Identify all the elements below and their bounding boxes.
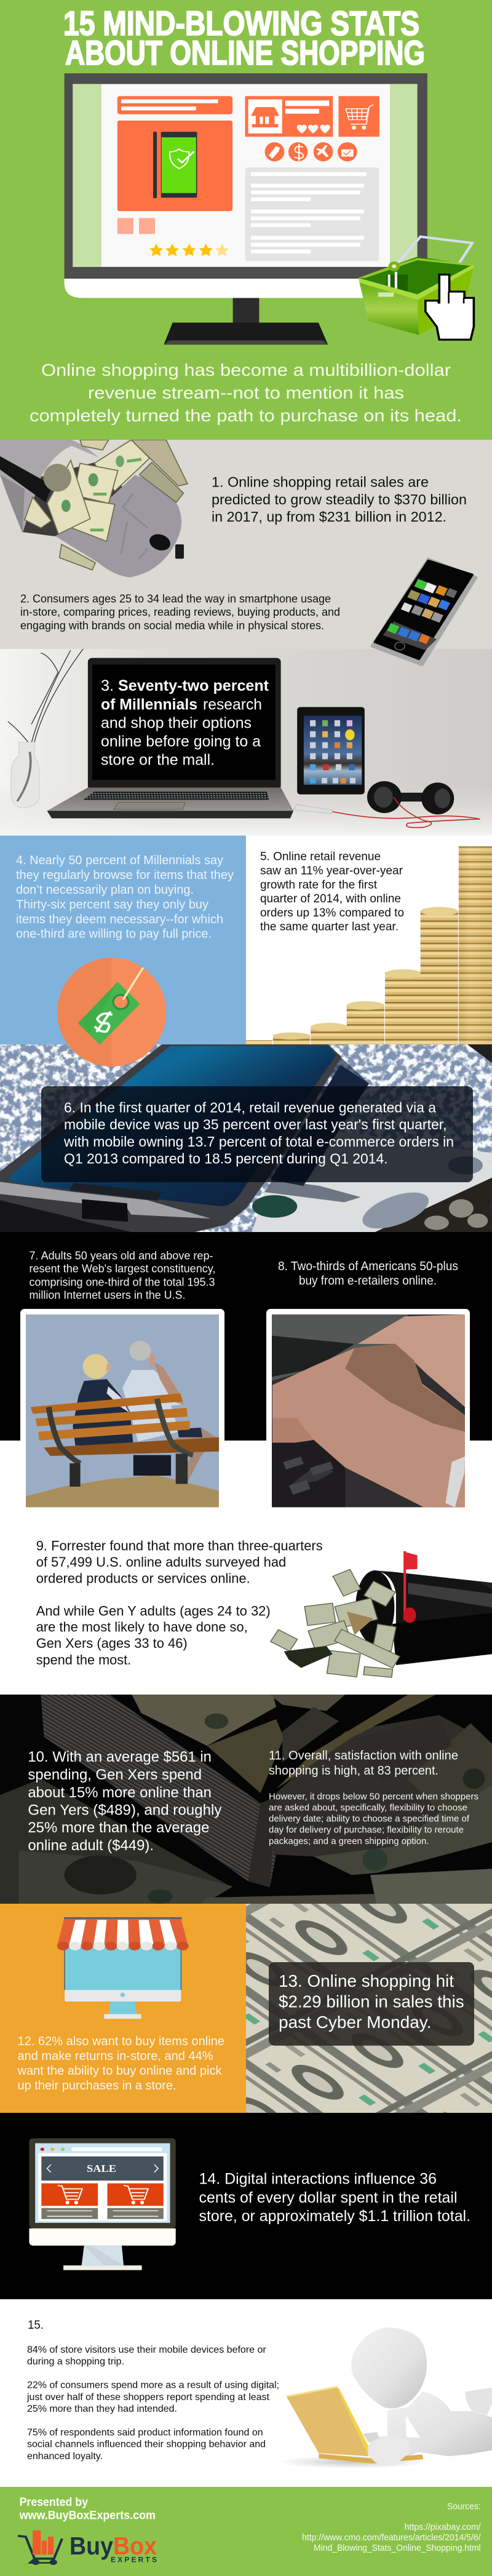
text: sources: http://www.cmo.com/features/articles/2014/5/6/ [302,2533,482,2543]
text: stat 15: just over half of these shoppers report spending at least [26,2392,270,2403]
icon: desktop monitor showing online store [65,73,427,344]
text: stat 4: don’t necessarily plan on buying. [16,883,194,897]
panel: stat 6 text box: Q1 2013 compared to 18.5 percent during Q1 2014. [64,1150,388,1166]
text: stat 12: up their purchases in a store. [17,2079,176,2093]
panel: stat 13 dollar bills photo [246,1904,492,2113]
text: stat 11 [269,1748,478,1847]
icon: Buy Box Experts logo: EXPERTS [111,2555,157,2564]
text: stat 12: 12. 62% also want to buy items online [17,2035,224,2048]
text: stat 10: 10. With an average $561 in [28,1749,212,1765]
text: stat 2: 2. Consumers ages 25 to 34 lead the way in smartphone usage [20,593,331,605]
text: stat 8: 8. Two-thirds of Americans 50-plus [278,1260,458,1273]
text: stat 10: 25% more than the average [28,1819,209,1836]
text: stat 8 [278,1260,458,1287]
text: stat 1 [212,474,467,525]
text: stat 11: packages; and a green shipping option. [269,1836,429,1847]
text: stat 4: 4. Nearly 50 percent of Millennials say [16,854,223,867]
icon: monitor showing sale web page [29,2138,176,2270]
icon: Buy Box Experts logo [18,2530,157,2565]
text: stat 4: one-third are willing to pay full price. [16,928,212,941]
text: sources: Sources: [447,2502,481,2512]
text: stat 15: 75% of respondents said product information found on [27,2427,263,2438]
panel: laptop and tablet photo [0,649,492,836]
text: stat 15: 15. [28,2319,44,2332]
icon: storefront monitor with striped awning [57,1917,189,2019]
text: intro: revenue stream--not to mention it has [88,383,404,402]
text: stat 9 [36,1538,323,1668]
text: stat 3 on laptop screen: store or the mall. [101,751,215,768]
text: stat 2: engaging with brands on social media while in physical stores. [20,619,324,632]
text: stat 1: 1. Online shopping retail sales are [212,474,429,490]
text: stat 9: are the most likely to have done so, [36,1620,248,1635]
text: stat 2 [20,593,340,632]
panel: stat 5 white background [246,835,492,1044]
text: stat 3 on laptop screen: of Millennials [101,696,197,713]
text: stat 15: during a shopping trip. [27,2356,124,2367]
panel: stat 15 white background [0,2299,492,2487]
text: stat 1: predicted to grow steadily to $370 billion [212,491,467,507]
text: intro [30,360,462,425]
panel: stat 13 text box: $2.29 billion in sales this [279,1992,464,2011]
panel: stat 14 black background [0,2113,492,2299]
panel: framed photo of hands on keyboard [266,1309,470,1513]
text: stat 14: 14. Digital interactions influence 36 [199,2170,437,2187]
text: stat 15 [26,2319,279,2462]
text: stat 12 [17,2035,224,2093]
title [63,4,425,72]
text: stat 5: orders up 13% compared to [260,906,404,920]
text: stat 14 [199,2170,470,2225]
icon: monitor showing sale web page: SALE [87,2163,116,2174]
text: stat 9: 9. Forrester found that more than three-quarters [36,1538,323,1554]
text: stat 9: ordered products or services online. [36,1571,250,1586]
panel: stat 6 phone and dollar photo [0,1044,492,1236]
text: intro: completely turned the path to purchase on its head. [30,406,462,425]
icon: green shopping basket with hand cursor [359,237,474,340]
text: stat 10: about 15% more online than [28,1784,212,1801]
panel: stat 6 text box [41,1086,473,1182]
panel: stats 10 and 11 dark money photo [0,1695,492,1904]
text: stat 5 [260,850,404,934]
text: stat 11: However, it drops below 50 percent when shoppers [269,1791,478,1802]
text: stat 9: spend the most. [36,1652,131,1668]
text: stat 11: are asked about, specifically, flexibility to choose [269,1803,467,1813]
text: stat 3 on laptop screen: online before going to a [101,733,261,750]
text: stat 7: 7. Adults 50 years old and above rep- [30,1249,213,1262]
panel: header background [0,0,492,440]
text: stat 3 on laptop screen: and shop their options [101,714,252,731]
panel: stat 4 blue background [0,835,246,1044]
text: stat 10 [28,1749,221,1854]
panel: stat 6 text box: 6. In the first quarter of 2014, retail revenue generated via a [64,1100,436,1116]
text: stat 15: 84% of store visitors use their mobile devices before or [27,2345,266,2355]
text: presented by: www.BuyBoxExperts.com [19,2510,156,2522]
text: stat 2: in-store, comparing prices, reading reviews, buying products, and [20,606,340,618]
text: stat 8: buy from e-retailers online. [299,1274,437,1287]
text: stat 3 on laptop screen: 3. [101,677,114,694]
text: stat 4: Thirty-six percent say they only buy [16,898,208,912]
panel: footer background [0,2487,492,2576]
icon: price tag in orange circle [57,958,166,1067]
panel: stats 1 and 2 background [0,440,492,652]
text: stat 9: of 57,499 U.S. online adults surveyed had [36,1554,286,1570]
text: stat 4: they regularly browse for items that they [16,869,234,882]
text: stat 10: online adult ($449). [28,1837,154,1854]
panel: stat 13 text box: 13. Online shopping hit [279,1971,454,1990]
text: stat 11: 11. Overall, satisfaction with online [269,1748,458,1762]
panel: stats 9 white background [0,1441,492,1695]
panel: stat 13 text box [269,1962,474,2046]
panel: stat 12 orange background [0,1904,246,2113]
text: stat 3 on laptop screen [101,677,269,768]
icon: smartphone with app icons [372,559,476,665]
text: stat 12: want the ability to buy online and pick [17,2064,222,2078]
text: stat 14: store, or approximately $1.1 trillion total. [199,2208,470,2225]
icon: mailbox overflowing with money [0,440,188,578]
panel: framed photo of couple on bench [20,1309,224,1513]
text: presented by [19,2496,156,2522]
text: stat 15: 22% of consumers spend more as a result of using digital; [27,2380,279,2391]
text: stat 5: the same quarter last year. [260,920,399,934]
text: stat 11: day for delivery of purchase; flexibility to reroute [269,1824,464,1835]
text: stat 15: social channels influenced their shopping behavior and [27,2439,266,2450]
text: stat 7: resent the Web's largest constituency, [30,1263,215,1275]
icon: black mailbox stuffed with cash [271,1551,492,1677]
text: stat 4 [16,854,234,941]
text: stat 5: growth rate for the first [260,878,378,891]
text: stat 10: spending, Gen Xers spend [28,1767,202,1783]
text: stat 11: shopping is high, at 83 percent. [269,1763,438,1778]
text: stat 1: in 2017, up from $231 billion in 2012. [212,509,446,525]
text: stat 12: and make returns in-store, and 44% [17,2049,213,2063]
icon: Buy Box Experts logo: Buy [69,2532,113,2560]
icon: Buy Box Experts logo: Box [113,2532,157,2560]
text: intro: Online shopping has become a multibillion-dollar [41,360,451,380]
text: stat 7: comprising one-third of the total 195.3 [30,1276,215,1288]
text: stat 9: Gen Xers (ages 33 to 46) [36,1636,188,1651]
text: stat 4: items they deem necessary--for which [16,913,223,926]
text: sources: https://pixabay.com/ [405,2522,482,2532]
text: stat 11: delivery date; ability to choose a specified time of [269,1814,470,1824]
illustration: stacks of gold coins [246,846,492,1046]
text: stat 5: 5. Online retail revenue [260,850,381,864]
text: stat 5: saw an 11% year-over-year [260,864,403,877]
text: stat 7 [30,1249,215,1302]
text: stat 7: million Internet users in the U.S. [30,1289,186,1302]
text: stat 3 on laptop screen: research [203,696,262,713]
text: stat 9: And while Gen Y adults (ages 24 to 32) [36,1603,271,1618]
text: stat 14: cents of every dollar spent in the retail [199,2189,458,2206]
text: stat 3 on laptop screen: Seventy-two percent [118,677,269,694]
text: stat 15: enhanced loyalty. [27,2451,103,2462]
text: sources: Mind_Blowing_Stats_Online_Shopping.html [314,2543,481,2553]
text: stat 10: Gen Yers ($489), and roughly [28,1802,221,1818]
text: stat 5: quarter of 2014, with online [260,892,401,905]
text: presented by: Presented by [20,2496,88,2509]
panel: stat 6 text box: mobile device was up 35 percent over last year's first quarter, [64,1116,446,1132]
panel: stats 7 and 8 black background [0,1232,492,1441]
text: stat 15: 25% more than they had intended. [27,2404,177,2414]
illustration: 3D figure lying down with gold laptop [279,2328,492,2468]
panel: stat 13 text box: past Cyber Monday. [279,2013,432,2032]
panel: stat 6 text box: with mobile owning 13.7 percent of total e-commerce orders in [63,1134,454,1150]
text: sources [302,2502,482,2553]
title: 15 MIND-BLOWING STATS [63,4,419,42]
